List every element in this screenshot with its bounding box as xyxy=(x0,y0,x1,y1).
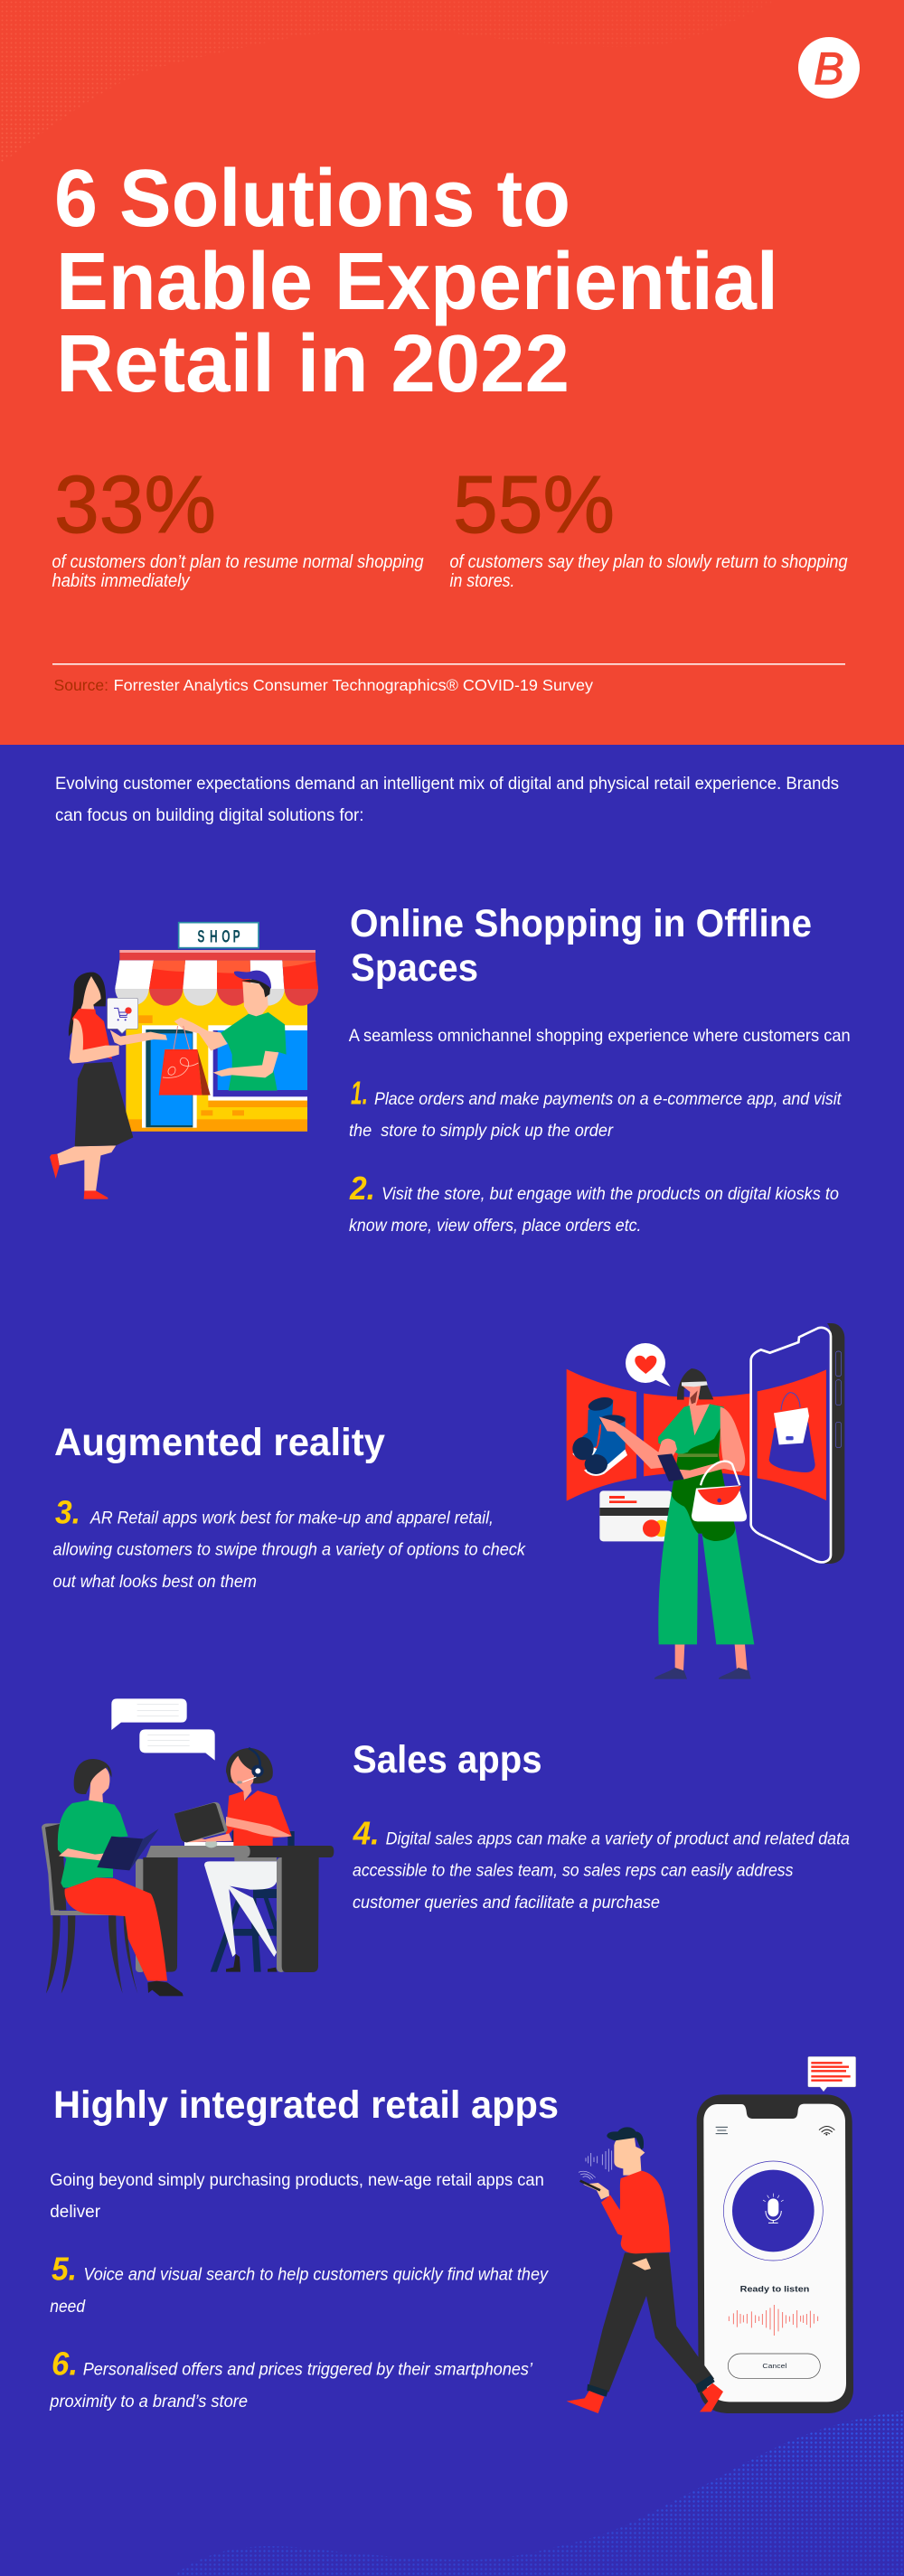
heading: online shopping: Online Shopping in Offline xyxy=(350,902,812,945)
title: Enable Experiential xyxy=(56,237,778,327)
logo: B badge xyxy=(798,37,860,99)
sub: speech bubbles xyxy=(111,1698,215,1761)
item 1: the store to simply pick up the order xyxy=(349,1121,614,1141)
sub: walking man xyxy=(567,2127,723,2413)
item 3: out what looks best on them xyxy=(52,1572,257,1592)
sub: woman customer xyxy=(50,973,167,1199)
item 2 xyxy=(349,1170,839,1236)
text: retail apps intro: deliver xyxy=(50,2202,100,2222)
text: retail apps intro: Going beyond simply purchasing products, new-age retail apps can xyxy=(50,2170,544,2190)
sub: shopkeeper xyxy=(174,971,287,1091)
sub: awning xyxy=(115,950,318,1006)
title xyxy=(54,154,778,409)
sub: notification bubble xyxy=(808,2056,856,2092)
item 3: 3. xyxy=(55,1493,80,1531)
sub: credit card xyxy=(599,1490,672,1541)
sub: boots xyxy=(572,1395,627,1476)
source line: Forrester Analytics Consumer Technographics® COVID-19 Survey xyxy=(114,676,593,694)
item 4: Digital sales apps can make a variety of product and related data xyxy=(386,1829,850,1849)
stat: 55 percent xyxy=(450,460,848,591)
item 5: Voice and visual search to help customers quickly find what they xyxy=(83,2265,549,2285)
sub: phone: Ready to listen xyxy=(740,2284,810,2293)
item 2: 2. xyxy=(349,1170,375,1207)
stat: 55 percent: of customers say they plan to slowly return to shopping xyxy=(450,552,848,572)
stat: 55 percent: 55% xyxy=(453,460,615,550)
sub: table xyxy=(136,1840,334,1972)
sub: customer woman xyxy=(58,1759,184,1996)
item 5 xyxy=(50,2251,549,2317)
item 1 xyxy=(349,1074,843,1141)
logo: B badge: B xyxy=(814,43,844,94)
sub: phone xyxy=(697,2094,853,2413)
sub: woman's handbag xyxy=(692,1462,747,1521)
item 5: 5. xyxy=(52,2251,77,2287)
heading: augmented reality: Augmented reality xyxy=(54,1421,385,1464)
item 6: Personalised offers and prices triggered by their smartphones’ xyxy=(83,2359,533,2379)
item 3: AR Retail apps work best for make-up and apparel retail, xyxy=(89,1508,494,1528)
intro text: can focus on building digital solutions for: xyxy=(55,805,363,825)
heading: online shopping xyxy=(350,902,812,990)
sub: left chair xyxy=(42,1823,137,1994)
sub: shop sign: SHOP xyxy=(197,927,240,946)
sub: shop building xyxy=(126,985,307,1132)
sub: voice sound waves xyxy=(579,2148,612,2179)
item 1: Place orders and make payments on a e-commerce app, and visit xyxy=(374,1089,843,1109)
source line: Source: xyxy=(54,676,108,694)
item 3: allowing customers to swipe through a variety of options to check xyxy=(52,1540,526,1560)
sub: woman with AR visor xyxy=(599,1368,754,1679)
intro text: Evolving customer expectations demand an intelligent mix of digital and physical retail experience. Brands xyxy=(55,774,839,794)
item 4: customer queries and facilitate a purchase xyxy=(353,1893,660,1913)
item 5: need xyxy=(50,2297,86,2317)
sub: sales rep woman xyxy=(174,1748,292,1972)
stat: 55 percent: in stores. xyxy=(450,571,515,591)
sub: phone frame xyxy=(751,1323,844,1564)
item 6 xyxy=(49,2345,533,2411)
sub: shop sign xyxy=(179,923,259,948)
sub: phone: Cancel xyxy=(762,2362,787,2370)
title: 6 Solutions to xyxy=(54,154,570,244)
panel: online shopping illustration xyxy=(50,923,318,1199)
panel: red header background xyxy=(0,0,904,745)
item 4 xyxy=(353,1815,850,1913)
title: Retail in 2022 xyxy=(56,319,570,409)
item 6: 6. xyxy=(52,2345,78,2383)
sub: heart speech bubble xyxy=(626,1343,671,1387)
sub: red panels xyxy=(567,1369,826,1501)
item 2: know more, view offers, place orders etc. xyxy=(349,1216,642,1236)
heading: sales apps: Sales apps xyxy=(353,1738,542,1782)
stat: 33 percent: of customers don’t plan to resume normal shopping xyxy=(52,552,423,572)
stat: 33 percent: habits immediately xyxy=(52,571,190,591)
heading: highly integrated retail apps: Highly integrated retail apps xyxy=(53,2083,559,2127)
item 3 xyxy=(52,1493,526,1592)
sub: handbag on phone xyxy=(769,1393,815,1472)
panel: sales apps illustration xyxy=(42,1698,334,1996)
item 6: proximity to a brand’s store xyxy=(49,2392,248,2411)
stat: 33 percent: 33% xyxy=(54,460,216,550)
item 2: Visit the store, but engage with the products on digital kiosks to xyxy=(381,1184,839,1204)
sub: shopping bag xyxy=(159,1026,211,1095)
sub: right chair xyxy=(211,1831,295,1972)
item 1: 1. xyxy=(351,1074,368,1112)
stat: 33 percent xyxy=(52,460,423,591)
item 4: 4. xyxy=(353,1815,380,1851)
text: online shopping intro: A seamless omnichannel shopping experience where customers can xyxy=(349,1026,851,1046)
panel: blue body background xyxy=(0,745,904,2576)
panel: voice search illustration xyxy=(567,2056,856,2413)
panel: augmented reality illustration xyxy=(567,1323,844,1679)
intro text xyxy=(55,774,839,825)
heading: online shopping: Spaces xyxy=(351,946,478,990)
sub: cart popup xyxy=(108,998,138,1033)
item 4: accessible to the sales team, so sales reps can easily address xyxy=(353,1860,794,1880)
text: retail apps intro xyxy=(50,2170,544,2222)
